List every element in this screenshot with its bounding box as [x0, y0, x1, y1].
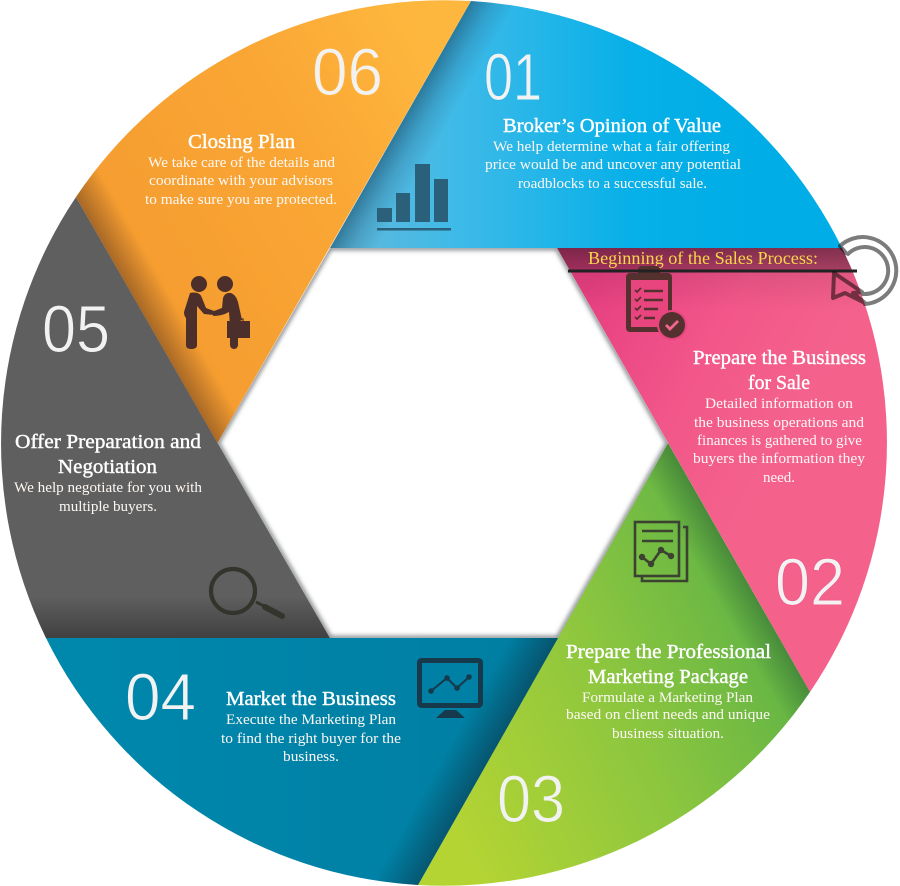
text: step 1 description: price would be and uncover any potential: [485, 157, 741, 173]
heading: Prepare the Professional Marketing Package: [566, 642, 772, 688]
segment 04: teal: [46, 638, 558, 885]
icon: bar chart: [377, 164, 451, 230]
heading: Prepare the Professional Marketing Package: Marketing Package: [588, 667, 748, 688]
text: step 6 description: [145, 155, 337, 208]
icon: circular arrow: [833, 237, 896, 304]
text: step 2 description: the business operations and: [694, 415, 865, 431]
heading: Offer Preparation and Negotiation: [15, 432, 201, 478]
text: step 3 description: Formulate a Marketing Plan: [582, 690, 754, 706]
text: step 5 description: We help negotiate for you with: [14, 480, 203, 496]
heading: Prepare the Business for Sale: Prepare the Business: [693, 348, 866, 369]
number 03: 03: [497, 762, 565, 837]
icon: monitor with line chart: [420, 660, 480, 718]
segment 06: orange: [76, 0, 471, 443]
text: step 3 description: based on client needs and unique: [566, 707, 770, 723]
number 05: 05: [42, 292, 110, 367]
text: step 1 description: [485, 139, 741, 192]
icon: clipboard checklist: [626, 266, 687, 340]
text: step 2 description: [693, 396, 866, 486]
icon: magnifying glass: [211, 569, 282, 616]
icon: handshake with briefcase: [184, 276, 250, 349]
heading: Market the Business: Market the Business: [226, 689, 396, 710]
text: step 1 description: We help determine what a fair offering: [493, 139, 730, 155]
heading: Prepare the Business for Sale: for Sale: [748, 373, 810, 394]
segment 01: blue: [330, 1, 842, 248]
text: step 2 description: finances is gathered to give: [697, 433, 862, 449]
number 04: 04: [125, 660, 196, 735]
banner underline: [568, 270, 857, 272]
heading: Prepare the Business for Sale: [693, 348, 866, 394]
text: step 2 description: Detailed information on: [705, 396, 854, 412]
text: step 3 description: [566, 690, 770, 742]
segment 03: green: [418, 443, 810, 886]
heading: Offer Preparation and Negotiation: Negotiation: [58, 457, 157, 478]
text: step 4 description: [221, 712, 401, 765]
heading: Closing Plan: Closing Plan: [188, 132, 295, 153]
text: step 2 description: buyers the information they: [693, 451, 866, 467]
text: step 3 description: business situation.: [612, 726, 724, 742]
text: step 6 description: We take care of the details and: [148, 155, 336, 171]
text: step 6 description: to make sure you are protected.: [145, 192, 337, 208]
icon: documents with chart: [635, 522, 687, 581]
number 06: 06: [312, 35, 383, 110]
center white hexagon with inner shadow: [218, 248, 668, 638]
text: step 4 description: to find the right buyer for the: [221, 731, 401, 747]
text: step 5 description: [14, 480, 203, 515]
text: step 4 description: business.: [283, 749, 339, 765]
text: step 5 description: multiple buyers.: [59, 499, 157, 515]
text: step 6 description: coordinate with your advisors: [149, 173, 333, 189]
heading: Offer Preparation and Negotiation: Offer Preparation and: [15, 432, 201, 453]
text: step 4 description: Execute the Marketing Plan: [226, 712, 397, 728]
banner: Beginning of the Sales Process: Beginning of the Sales Process:: [588, 248, 818, 268]
heading: Prepare the Professional Marketing Package: Prepare the Professional: [566, 642, 772, 663]
segment 02: pink: [557, 248, 887, 692]
number 01: 01: [484, 40, 542, 115]
number 02: 02: [775, 545, 845, 620]
text: step 1 description: roadblocks to a successful sale.: [518, 176, 707, 192]
segment 05: gray: [1, 197, 330, 638]
text: step 2 description: need.: [763, 470, 795, 486]
heading: Broker's Opinion of Value: Broker’s Opinion of Value: [503, 116, 721, 137]
